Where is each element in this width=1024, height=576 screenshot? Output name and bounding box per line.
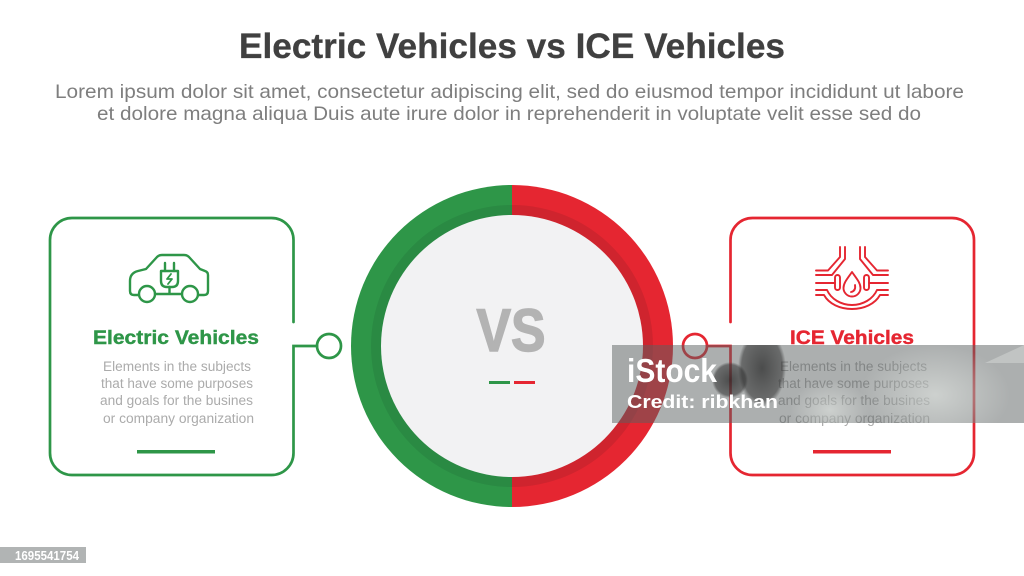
accent bar: ice: [813, 450, 891, 454]
description: ice vehicles: [778, 359, 930, 426]
intro text block: et dolore magna aliqua Duis aute irure dolor in reprehenderit in voluptate velit esse sed do: [97, 103, 921, 125]
ring halves: [351, 185, 512, 507]
card outline and connector: ice: [683, 218, 974, 475]
watermark logo: iStock: [627, 352, 718, 389]
description: ice vehicles: and goals for the busines: [778, 393, 930, 408]
icon: electric car: [130, 255, 208, 302]
heading: electric vehicles: Electric Vehicles: [93, 328, 259, 349]
heading: ice vehicles: ICE Vehicles: [790, 328, 914, 349]
description: electric vehicles: [100, 359, 254, 426]
image id tag: 1695541754: [15, 548, 80, 563]
watermark credit: Credit: ribkhan: [627, 392, 778, 412]
central versus circle: [351, 185, 673, 507]
watermark background: [612, 345, 1024, 423]
description: electric vehicles: or company organization: [103, 411, 254, 426]
intro text block: Lorem ipsum dolor sit amet, consectetur adipiscing elit, sed do eiusmod tempor incididunt ut labore: [55, 81, 964, 103]
description: ice vehicles: that have some purposes: [778, 376, 929, 391]
description: electric vehicles: and goals for the busines: [100, 393, 253, 408]
vs label: VS: [476, 297, 546, 364]
panel: electric vehicles: [50, 218, 341, 475]
accent bar: electric: [137, 450, 215, 454]
vs dashes: [489, 381, 535, 384]
title: Electric Vehicles vs ICE Vehicles: [239, 27, 785, 66]
card outline and connector: electric: [50, 218, 341, 475]
description: electric vehicles: Elements in the subjects: [103, 359, 251, 374]
description: electric vehicles: that have some purposes: [101, 376, 253, 391]
description: ice vehicles: or company organization: [779, 411, 930, 426]
icon: engine oil pipes: [816, 247, 888, 309]
watermark band: [612, 345, 1024, 423]
panel: ice vehicles: [683, 218, 974, 475]
description: ice vehicles: Elements in the subjects: [780, 359, 927, 374]
intro text block: [55, 81, 964, 125]
